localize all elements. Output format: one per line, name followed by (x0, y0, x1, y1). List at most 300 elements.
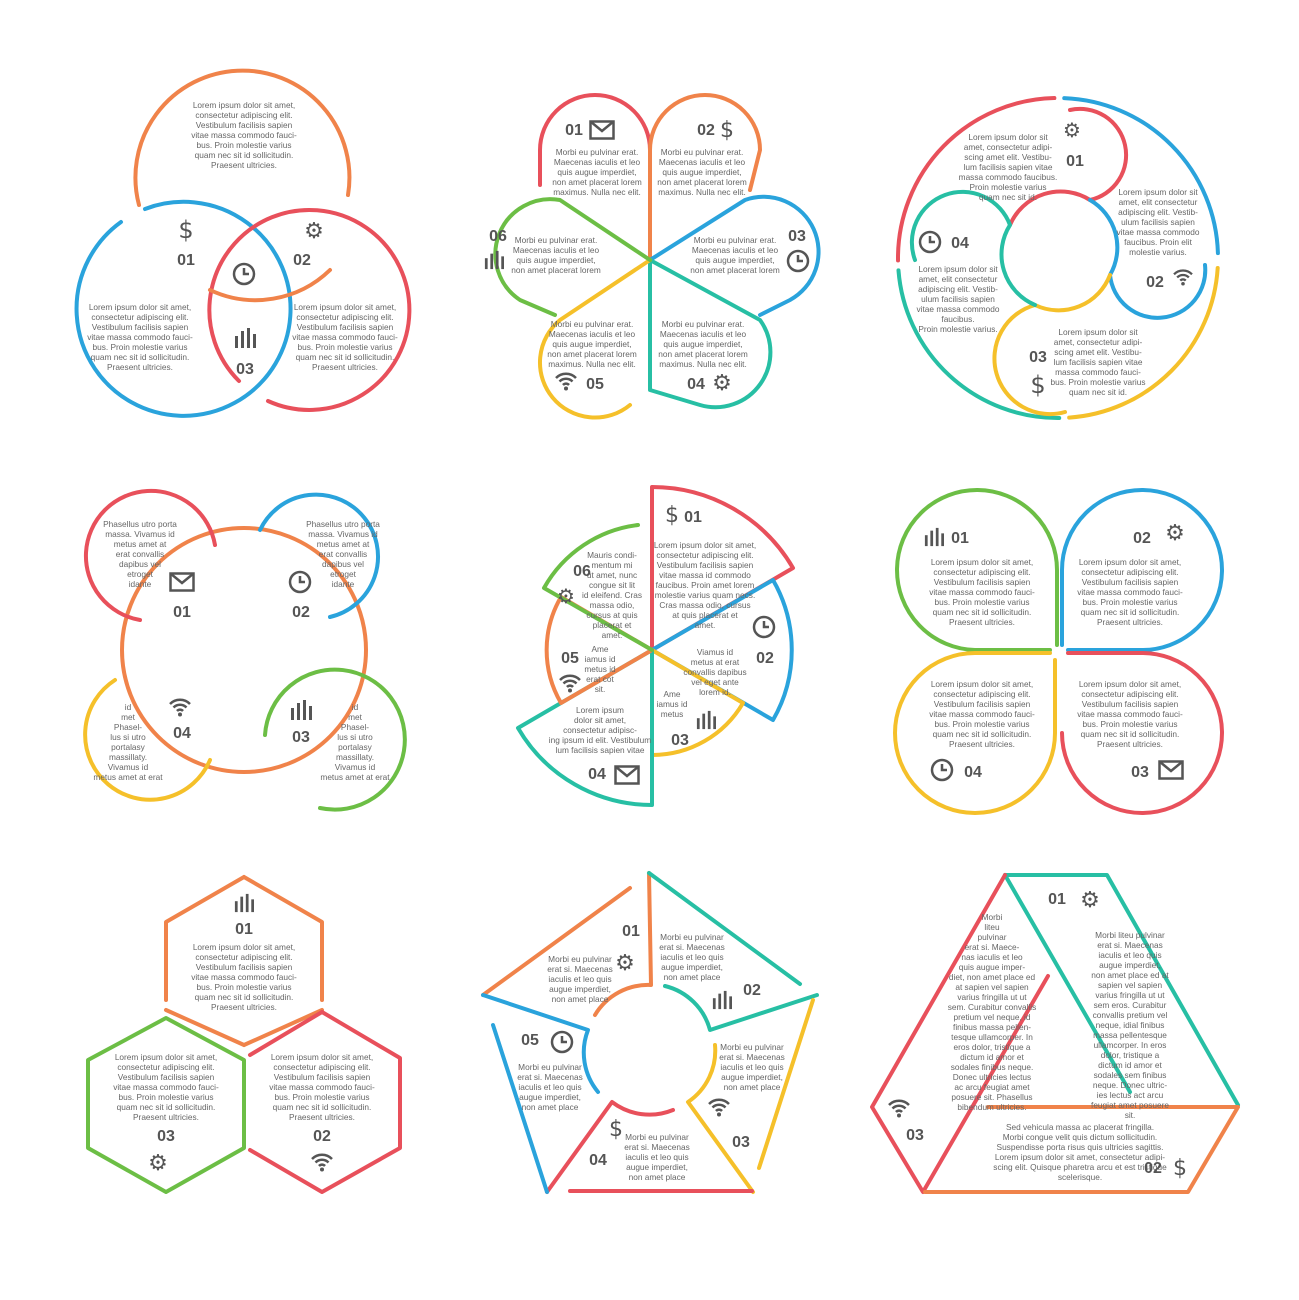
panel: flower six petals: quis augue imperdiet, (663, 339, 743, 349)
panel: flower six petals: maximus. Nulla nec elit. (548, 359, 636, 369)
panel: impossible triangle: 03 (906, 1127, 924, 1144)
panel: impossible triangle: sit. (1125, 1110, 1135, 1120)
panel: circle with four inner lobes: massa commodo faucibus. (959, 172, 1057, 182)
panel: impossible triangle: sodales sem finibus (1094, 1070, 1166, 1080)
panel: four lobes clover: quam nec sit id sollicitudin. (933, 607, 1031, 617)
panel: four lobes clover: vitae massa commodo fauci- (929, 709, 1035, 719)
panel: three hexagons: vitae massa commodo fauci- (269, 1082, 375, 1092)
panel: venn three circles: Vestibulum facilisis sapien (92, 322, 189, 332)
panel: pentagon segments: ⚙ (615, 951, 635, 976)
panel: three hexagons: 02 (313, 1128, 331, 1145)
panel: pentagon segments: Morbi eu pulvinar (548, 954, 612, 964)
panel: pie of six slices: amet. (602, 630, 622, 640)
panel: flower six petals: $ (720, 118, 734, 143)
panel: flower six petals: non amet placerat lorem (511, 265, 601, 275)
panel: circle with four inner lobes: scing amet elit. Vestibu- (1054, 347, 1142, 357)
panel: impossible triangle: diet, non amet place ed (949, 972, 1036, 982)
panel: flower six petals: Maecenas iaculis et leo (659, 157, 746, 167)
panel: venn three circles: vitae massa commodo fauci- (191, 130, 297, 140)
panel: pentagon segments: 03 (732, 1134, 750, 1151)
panel: venn three circles: vitae massa commodo fauci- (292, 332, 398, 342)
panel: impossible triangle: ⚙ (1080, 888, 1100, 913)
panel: venn three circles: 01 (177, 252, 195, 269)
panel: impossible triangle: varius fringilla ut ut (1095, 990, 1165, 1000)
panel: impossible triangle: neque, idial finibus (1096, 1020, 1164, 1030)
panel: impossible triangle: tesque ullamcorper. In (951, 1032, 1033, 1042)
panel: impossible triangle: finibus massa pellen- (953, 1022, 1031, 1032)
panel: circle with four inner lobes: lum facilisis sapien vitae (964, 162, 1053, 172)
panel: flower six petals: non amet placerat lorem (547, 349, 637, 359)
panel: circle with four inner lobes: amet, consectetur adipi- (1054, 337, 1143, 347)
panel: four lobes clover (895, 490, 1222, 813)
panel: pentagon segments (483, 873, 817, 1192)
panel: four lobes clover: Vestibulum facilisis sapien (934, 577, 1031, 587)
panel: three hexagons: 03 (157, 1128, 175, 1145)
panel: impossible triangle: sem. Curabitur convallis (948, 1002, 1036, 1012)
panel: pie of six slices: dolor sit amet, (574, 715, 626, 725)
panel: pie of six slices: molestie varius quam necs. (655, 590, 755, 600)
panel: central circle with four circles: id (352, 702, 358, 712)
panel: central circle with four circles: metus amet at erat (320, 772, 390, 782)
panel: three hexagons: consectetur adipiscing elit. (117, 1062, 215, 1072)
panel: impossible triangle: $ (1173, 1156, 1187, 1181)
panel: three hexagons: vitae massa commodo fauci- (113, 1082, 219, 1092)
panel: central circle with four circles: Phasellus utro porta (103, 519, 177, 529)
panel: impossible triangle: sem eros. Curabitur (1094, 1000, 1167, 1010)
panel: central circle with four circles: dapibus vel (322, 559, 364, 569)
panel: pie of six slices: metus at erat (691, 657, 740, 667)
panel: central circle with four circles: metus amet at (317, 539, 370, 549)
panel: pie of six slices: Cras massa odio, cursus (659, 600, 751, 610)
panel: circle with four inner lobes: lum facilisis sapien vitae (1054, 357, 1143, 367)
panel: flower six petals: Maecenas iaculis et leo (692, 245, 779, 255)
panel: four lobes clover: consectetur adipiscing elit. (1081, 567, 1179, 577)
panel: central circle with four circles: Vivamus id (335, 762, 376, 772)
panel: impossible triangle: nas iaculis et leo (961, 952, 1023, 962)
panel: pentagon segments: Morbi eu pulvinar (625, 1132, 689, 1142)
panel: pie of six slices: ing ipsum id elit. Vestibulum (549, 735, 651, 745)
panel: impossible triangle: convallis pretium vel (1093, 1010, 1168, 1020)
panel: pie of six slices: metus (661, 709, 683, 719)
panel: venn three circles: bus. Proin molestie varius (196, 140, 292, 150)
panel: impossible triangle: sapien vel sapien (1098, 980, 1162, 990)
panel: impossible triangle: dictum id amor et (1098, 1060, 1163, 1070)
panel: pentagon segments: non amet place (724, 1082, 781, 1092)
panel: venn three circles: Praesent ultricies. (107, 362, 173, 372)
panel: pie of six slices: Ame (663, 689, 681, 699)
panel: venn three circles: quam nec sit id sollicitudin. (296, 352, 394, 362)
panel: four lobes clover: Praesent ultricies. (1097, 617, 1163, 627)
panel: pie of six slices: sit. (595, 684, 605, 694)
panel: three hexagons: vitae massa commodo fauci- (191, 972, 297, 982)
panel: flower six petals: quis augue imperdiet, (695, 255, 775, 265)
panel: four lobes clover: quam nec sit id sollicitudin. (1081, 607, 1179, 617)
panel: impossible triangle: posuere sit. Phasellus (951, 1092, 1033, 1102)
panel: four lobes clover: Vestibulum facilisis sapien (1082, 699, 1179, 709)
panel: impossible triangle: Sed vehicula massa ac placerat fringilla. (1006, 1122, 1154, 1132)
panel: pentagon segments: iaculis et leo quis (660, 952, 724, 962)
panel: pie of six slices: Lorem ipsum dolor sit amet, (654, 540, 756, 550)
panel: central circle with four circles: dapibus vel (119, 559, 161, 569)
panel: flower six petals: maximus. Nulla nec elit. (659, 359, 747, 369)
panel: central circle with four circles: Vivamus id (108, 762, 149, 772)
panel: three hexagons: bus. Proin molestie varius (274, 1092, 370, 1102)
panel: four lobes clover: vitae massa commodo fauci- (929, 587, 1035, 597)
panel: three hexagons: bus. Proin molestie varius (196, 982, 292, 992)
panel: impossible triangle: Lorem ipsum dolor sit amet, consectetur adipi- (995, 1152, 1165, 1162)
panel: circle with four inner lobes: amet, elit consectetur (1119, 197, 1198, 207)
panel: four lobes clover: 01 (951, 530, 969, 547)
panel: central circle with four circles: massillaty. (109, 752, 147, 762)
panel: circle with four inner lobes: ulum facilisis sapien (1121, 217, 1195, 227)
panel: three hexagons: Praesent ultricies. (133, 1112, 199, 1122)
panel: pentagon segments: Morbi eu pulvinar (518, 1062, 582, 1072)
panel: pie of six slices: Ame (591, 644, 609, 654)
panel: circle with four inner lobes: adipiscing elit. Vestib- (918, 284, 998, 294)
panel: flower six petals: 02 (697, 122, 715, 139)
panel: impossible triangle: liteu (984, 922, 1000, 932)
panel: impossible triangle: quis augue imper- (959, 962, 1025, 972)
panel: pie of six slices: faucibus. Proin amet lorem (656, 580, 754, 590)
panel: four lobes clover: bus. Proin molestie varius (934, 719, 1030, 729)
panel: impossible triangle (872, 875, 1238, 1192)
panel: three hexagons: consectetur adipiscing elit. (273, 1062, 371, 1072)
panel: venn three circles (77, 71, 409, 416)
panel: pie of six slices: id eleifend. Cras (582, 590, 642, 600)
panel: venn three circles: consectetur adipiscing elit. (296, 312, 394, 322)
panel: circle with four inner lobes: Lorem ipsum dolor sit (968, 132, 1048, 142)
panel: flower six petals: quis augue imperdiet, (557, 167, 637, 177)
panel: pentagon segments: erat si. Maecenas (517, 1072, 583, 1082)
panel: central circle with four circles: Phasellus utro porta (306, 519, 380, 529)
panel: three hexagons: quam nec sit id sollicitudin. (195, 992, 293, 1002)
panel: four lobes clover: Lorem ipsum dolor sit amet, (931, 679, 1033, 689)
panel: four lobes clover: consectetur adipiscing elit. (933, 689, 1031, 699)
panel: flower six petals: maximus. Nulla nec elit. (658, 187, 746, 197)
panel: four lobes clover: Vestibulum facilisis sapien (934, 699, 1031, 709)
panel: pie of six slices: cursus at quis (586, 610, 638, 620)
panel: venn three circles: Vestibulum facilisis sapien (297, 322, 394, 332)
panel: impossible triangle: neque. Donec ultric- (1093, 1080, 1167, 1090)
panel: circle with four inner lobes: ulum facilisis sapien (921, 294, 995, 304)
panel: central circle with four circles: 01 (173, 604, 191, 621)
panel: four lobes clover: bus. Proin molestie varius (1082, 719, 1178, 729)
panel: pentagon segments: augue imperdiet, (549, 984, 611, 994)
panel: pentagon segments: iaculis et leo quis (518, 1082, 582, 1092)
panel: three hexagons: Praesent ultricies. (211, 1002, 277, 1012)
panel: impossible triangle: pulvinar (977, 932, 1007, 942)
panel: pie of six slices: consectetur adipiscing elit. (656, 550, 754, 560)
panel: four lobes clover: vitae massa commodo fauci- (1077, 709, 1183, 719)
panel: pie of six slices (518, 487, 793, 805)
panel: impossible triangle: Suspendisse porta risus quis ultricies sagittis. (997, 1142, 1163, 1152)
panel: central circle with four circles: 04 (173, 725, 191, 742)
panel: impossible triangle: Morbi congue velit quis dictum sollicitudin. (1003, 1132, 1157, 1142)
panel: circle with four inner lobes: quam nec sit id. (1069, 387, 1127, 397)
panel: central circle with four circles: 02 (292, 604, 310, 621)
panel: three hexagons: consectetur adipiscing elit. (195, 952, 293, 962)
panel: impossible triangle: dictum id amor et (960, 1052, 1025, 1062)
panel: three hexagons (88, 877, 400, 1192)
panel: three hexagons: Lorem ipsum dolor sit amet, (271, 1052, 373, 1062)
panel: pie of six slices: 05 (561, 650, 579, 667)
panel: pentagon segments: augue imperdiet, (626, 1162, 688, 1172)
panel: impossible triangle: erat si. Maece- (965, 942, 1020, 952)
panel: three hexagons: bus. Proin molestie varius (118, 1092, 214, 1102)
panel: flower six petals: Maecenas iaculis et leo (660, 329, 747, 339)
panel: central circle with four circles: Phasel- (114, 722, 142, 732)
panel: circle with four inner lobes: $ (1030, 371, 1046, 399)
panel: pentagon segments: non amet place (522, 1102, 579, 1112)
panel: pie of six slices: metus id (584, 664, 616, 674)
panel: venn three circles: Lorem ipsum dolor sit amet, (294, 302, 396, 312)
panel: circle with four inner lobes: 01 (1066, 153, 1084, 170)
panel: flower six petals: non amet placerat lorem (690, 265, 780, 275)
panel: four lobes clover: vitae massa commodo fauci- (1077, 587, 1183, 597)
panel: central circle with four circles: massa. Vivamus id (105, 529, 175, 539)
panel: four lobes clover: consectetur adipiscing elit. (933, 567, 1031, 577)
panel: four lobes clover: Lorem ipsum dolor sit amet, (1079, 679, 1181, 689)
panel: pentagon segments: Morbi eu pulvinar (660, 932, 724, 942)
panel: venn three circles: ⚙ (304, 219, 324, 244)
panel: flower six petals: Morbi eu pulvinar erat. (515, 235, 597, 245)
panel: impossible triangle: scelerisque. (1058, 1172, 1102, 1182)
panel: pentagon segments: non amet place (629, 1172, 686, 1182)
panel: impossible triangle: ac arcu feugiat amet (954, 1082, 1030, 1092)
panel: flower six petals: quis augue imperdiet, (552, 339, 632, 349)
panel: circle with four inner lobes: molestie varius. (1129, 247, 1187, 257)
panel: circle with four inner lobes: Proin molestie varius. (918, 324, 998, 334)
panel: pie of six slices: Viamus id (697, 647, 733, 657)
panel: circle with four inner lobes: Lorem ipsum dolor sit (1058, 327, 1138, 337)
panel: impossible triangle: Morbi liteu pulvinar (1095, 930, 1165, 940)
panel: central circle with four circles: metus amet at erat (93, 772, 163, 782)
panel: three hexagons: Lorem ipsum dolor sit amet, (115, 1052, 217, 1062)
panel: impossible triangle: pretium vel neque, id (953, 1012, 1031, 1022)
panel: flower six petals: non amet placerat lorem (657, 177, 747, 187)
panel: four lobes clover: consectetur adipiscing elit. (1081, 689, 1179, 699)
panel: flower six petals: Maecenas iaculis et leo (549, 329, 636, 339)
panel: three hexagons: quam nec sit id sollicitudin. (273, 1102, 371, 1112)
panel: pie of six slices: lum facilisis sapien vitae (556, 745, 645, 755)
panel: pie of six slices: vitae massa id commodo (659, 570, 751, 580)
panel: three hexagons: quam nec sit id sollicitudin. (117, 1102, 215, 1112)
panel: flower six petals: 01 (565, 122, 583, 139)
panel: venn three circles: vitae massa commodo fauci- (87, 332, 193, 342)
panel: venn three circles: bus. Proin molestie varius (298, 342, 392, 352)
panel: pie of six slices: erat cot (586, 674, 615, 684)
panel: four lobes clover: Lorem ipsum dolor sit amet, (1079, 557, 1181, 567)
panel: flower six petals: Maecenas iaculis et leo (554, 157, 641, 167)
panel: three hexagons: Lorem ipsum dolor sit amet, (193, 942, 295, 952)
panel: four lobes clover: 02 (1133, 530, 1151, 547)
panel: pie of six slices: 04 (588, 766, 606, 783)
panel: pentagon segments: non amet place (664, 972, 721, 982)
panel: central circle with four circles: met (121, 712, 136, 722)
panel: pie of six slices: 01 (684, 509, 702, 526)
panel: pie of six slices: $ (665, 503, 679, 528)
panel: flower six petals: non amet placerat lorem (658, 349, 748, 359)
panel: flower six petals: maximus. Nulla nec elit. (553, 187, 641, 197)
panel: flower six petals: Morbi eu pulvinar erat. (694, 235, 776, 245)
panel: pentagon segments: erat si. Maecenas (659, 942, 725, 952)
panel: circle with four inner lobes: massa commodo fauci- (1055, 367, 1141, 377)
panel: circle with four inner lobes: Lorem ipsum dolor sit (1118, 187, 1198, 197)
panel: pentagon segments: iaculis et leo quis (548, 974, 612, 984)
panel: pentagon segments: erat si. Maecenas (624, 1142, 690, 1152)
panel: impossible triangle: iaculis et leo quis (1098, 950, 1162, 960)
panel: flower six petals: quis augue imperdiet, (662, 167, 742, 177)
panel: pentagon segments: augue imperdiet, (519, 1092, 581, 1102)
panel: circle with four inner lobes: quam nec sit id. (979, 192, 1037, 202)
panel: venn three circles: Praesent ultricies. (312, 362, 378, 372)
panel: central circle with four circles: portalasy (111, 742, 146, 752)
panel: venn three circles: Lorem ipsum dolor sit amet, (193, 100, 295, 110)
panel: circle with four inner lobes: 03 (1029, 349, 1047, 366)
panel: pie of six slices: placerat et (593, 620, 632, 630)
panel: three hexagons: Vestibulum facilisis sapien (118, 1072, 215, 1082)
panel: four lobes clover: Praesent ultricies. (949, 617, 1015, 627)
panel: venn three circles: consectetur adipiscing elit. (91, 312, 189, 322)
panel: impossible triangle: Morbi (982, 912, 1002, 922)
panel: impossible triangle: 01 (1048, 891, 1066, 908)
panel: central circle with four circles: lus si utro (337, 732, 373, 742)
panel: pentagon segments: iaculis et leo quis (720, 1062, 784, 1072)
panel: three hexagons: Vestibulum facilisis sapien (196, 962, 293, 972)
panel: four lobes clover: quam nec sit id sollicitudin. (1081, 729, 1179, 739)
panel: pie of six slices: mentum mi (591, 560, 633, 570)
panel: impossible triangle: ullamcorper. In eros (1094, 1040, 1166, 1050)
panel: pentagon segments: 04 (589, 1152, 607, 1169)
panel: flower six petals: Morbi eu pulvinar erat. (556, 147, 638, 157)
panel: pie of six slices: at quis placerat et (672, 610, 738, 620)
panel: pie of six slices: Mauris condi- (587, 550, 637, 560)
panel: pie of six slices: consectetur adipisc- (563, 725, 637, 735)
panel: flower six petals: 03 (788, 228, 806, 245)
panel: three hexagons: 01 (235, 921, 253, 938)
panel: flower six petals: Morbi eu pulvinar erat. (661, 147, 743, 157)
panel: flower six petals: Maecenas iaculis et leo (513, 245, 600, 255)
panel: pentagon segments: erat si. Maecenas (547, 964, 613, 974)
panel: pie of six slices: iamus id (585, 654, 616, 664)
panel: pie of six slices: congue sit lit (589, 580, 636, 590)
panel: pentagon segments: 02 (743, 982, 761, 999)
panel: pentagon segments: $ (609, 1117, 623, 1142)
panel: circle with four inner lobes (898, 98, 1218, 418)
panel: four lobes clover: Praesent ultricies. (949, 739, 1015, 749)
panel: flower six petals: ⚙ (712, 371, 732, 396)
panel: pie of six slices: convallis dapibus (683, 667, 747, 677)
panel: three hexagons: Praesent ultricies. (289, 1112, 355, 1122)
panel: four lobes clover: Praesent ultricies. (1097, 739, 1163, 749)
panel: venn three circles: $ (178, 216, 194, 244)
panel: pie of six slices: 03 (671, 732, 689, 749)
panel: venn three circles: 03 (236, 361, 254, 378)
panel: impossible triangle: 02 (1144, 1160, 1162, 1177)
panel: impossible triangle: dolor, tristique a (1101, 1050, 1160, 1060)
panel: four lobes clover: quam nec sit id sollicitudin. (933, 729, 1031, 739)
panel: central circle with four circles: metus amet at (114, 539, 167, 549)
panel: circle with four inner lobes: Proin molestie varius (969, 182, 1047, 192)
panel: pentagon segments: iaculis et leo quis (625, 1152, 689, 1162)
panel: venn three circles: consectetur adipiscing elit. (195, 110, 293, 120)
panel: circle with four inner lobes: ⚙ (1063, 118, 1081, 142)
panel: four lobes clover: 04 (964, 764, 982, 781)
panel: pentagon segments: Morbi eu pulvinar (720, 1042, 784, 1052)
panel: central circle with four circles: met (348, 712, 363, 722)
panel: circle with four inner lobes: faucibus. Proin elit (1124, 237, 1193, 247)
panel: impossible triangle: massa pellentesque (1093, 1030, 1167, 1040)
panel: impossible triangle: erat si. Maecenas (1097, 940, 1163, 950)
panel: circle with four inner lobes: amet, consectetur adipi- (964, 142, 1053, 152)
panel: central circle with four circles: erat convallis (116, 549, 164, 559)
panel: three hexagons: ⚙ (148, 1151, 168, 1176)
panel: impossible triangle: eros dolor, tristique a (953, 1042, 1031, 1052)
panel: central circle with four circles: lus si utro (110, 732, 146, 742)
panel: four lobes clover: ⚙ (1165, 521, 1185, 546)
panel: circle with four inner lobes: Lorem ipsum dolor sit (918, 264, 998, 274)
panel: four lobes clover: 03 (1131, 764, 1149, 781)
panel: circle with four inner lobes: bus. Proin molestie varius (1050, 377, 1146, 387)
panel: flower six petals: quis augue imperdiet, (516, 255, 596, 265)
panel: impossible triangle: varius fringilla ut ut (957, 992, 1027, 1002)
panel: circle with four inner lobes: faucibus. (941, 314, 975, 324)
panel: impossible triangle: Donec ultricies lectus (953, 1072, 1031, 1082)
panel: pentagon segments: augue imperdiet, (661, 962, 723, 972)
panel: pie of six slices: Lorem ipsum (576, 705, 624, 715)
panel: circle with four inner lobes: adipiscing elit. Vestib- (1118, 207, 1198, 217)
panel: venn three circles: quam nec sit id sollicitudin. (91, 352, 189, 362)
panel: flower six petals: 05 (586, 376, 604, 393)
panel: four lobes clover: Vestibulum facilisis sapien (1082, 577, 1179, 587)
panel: impossible triangle: scing elit. Quisque pharetra arcu et est tristique (993, 1162, 1167, 1172)
panel: three hexagons: Vestibulum facilisis sapien (274, 1072, 371, 1082)
panel: circle with four inner lobes: scing amet elit. Vestibu- (964, 152, 1052, 162)
panel: four lobes clover: Lorem ipsum dolor sit amet, (931, 557, 1033, 567)
panel: pie of six slices: amet. (695, 620, 715, 630)
panel: central circle with four circles: idante (129, 579, 152, 589)
panel: venn three circles: Vestibulum facilisis sapien (196, 120, 293, 130)
panel: pie of six slices: ut amet, nunc (587, 570, 637, 580)
panel: pie of six slices: lorem id. (699, 687, 731, 697)
panel: impossible triangle: ies lectus act arcu (1097, 1090, 1164, 1100)
panel: pentagon segments: non amet place (552, 994, 609, 1004)
panel: circle with four inner lobes: vitae massa commodo (1116, 227, 1200, 237)
panel: venn three circles: 02 (293, 252, 311, 269)
panel: flower six petals: Morbi eu pulvinar erat. (662, 319, 744, 329)
panel: impossible triangle: bibendum ultricies. (957, 1102, 1027, 1112)
panel: impossible triangle: feugiat amet posuere (1091, 1100, 1169, 1110)
panel: pentagon segments: augue imperdiet, (721, 1072, 783, 1082)
panel: pentagon segments: 05 (521, 1032, 539, 1049)
panel: impossible triangle: at sapien vel sapien (955, 982, 1029, 992)
panel: venn three circles: quam nec sit id sollicitudin. (195, 150, 293, 160)
panel: flower six petals: non amet placerat lorem (552, 177, 642, 187)
panel: circle with four inner lobes: 04 (951, 235, 969, 252)
panel: central circle with four circles: etroget (330, 569, 357, 579)
panel: circle with four inner lobes: amet, elit consectetur (919, 274, 998, 284)
panel: central circle with four circles: portalasy (338, 742, 373, 752)
panel: venn three circles: Lorem ipsum dolor sit amet, (89, 302, 191, 312)
panel: pentagon segments: 01 (622, 923, 640, 940)
panel: central circle with four circles: 03 (292, 729, 310, 746)
panel: pie of six slices: 02 (756, 650, 774, 667)
panel: central circle with four circles: massillaty. (336, 752, 374, 762)
panel: venn three circles: Praesent ultricies. (211, 160, 277, 170)
panel: flower six petals: Morbi eu pulvinar erat. (551, 319, 633, 329)
panel: central circle with four circles: erat convallis (319, 549, 367, 559)
panel: impossible triangle: sodales finibus neque. (951, 1062, 1033, 1072)
